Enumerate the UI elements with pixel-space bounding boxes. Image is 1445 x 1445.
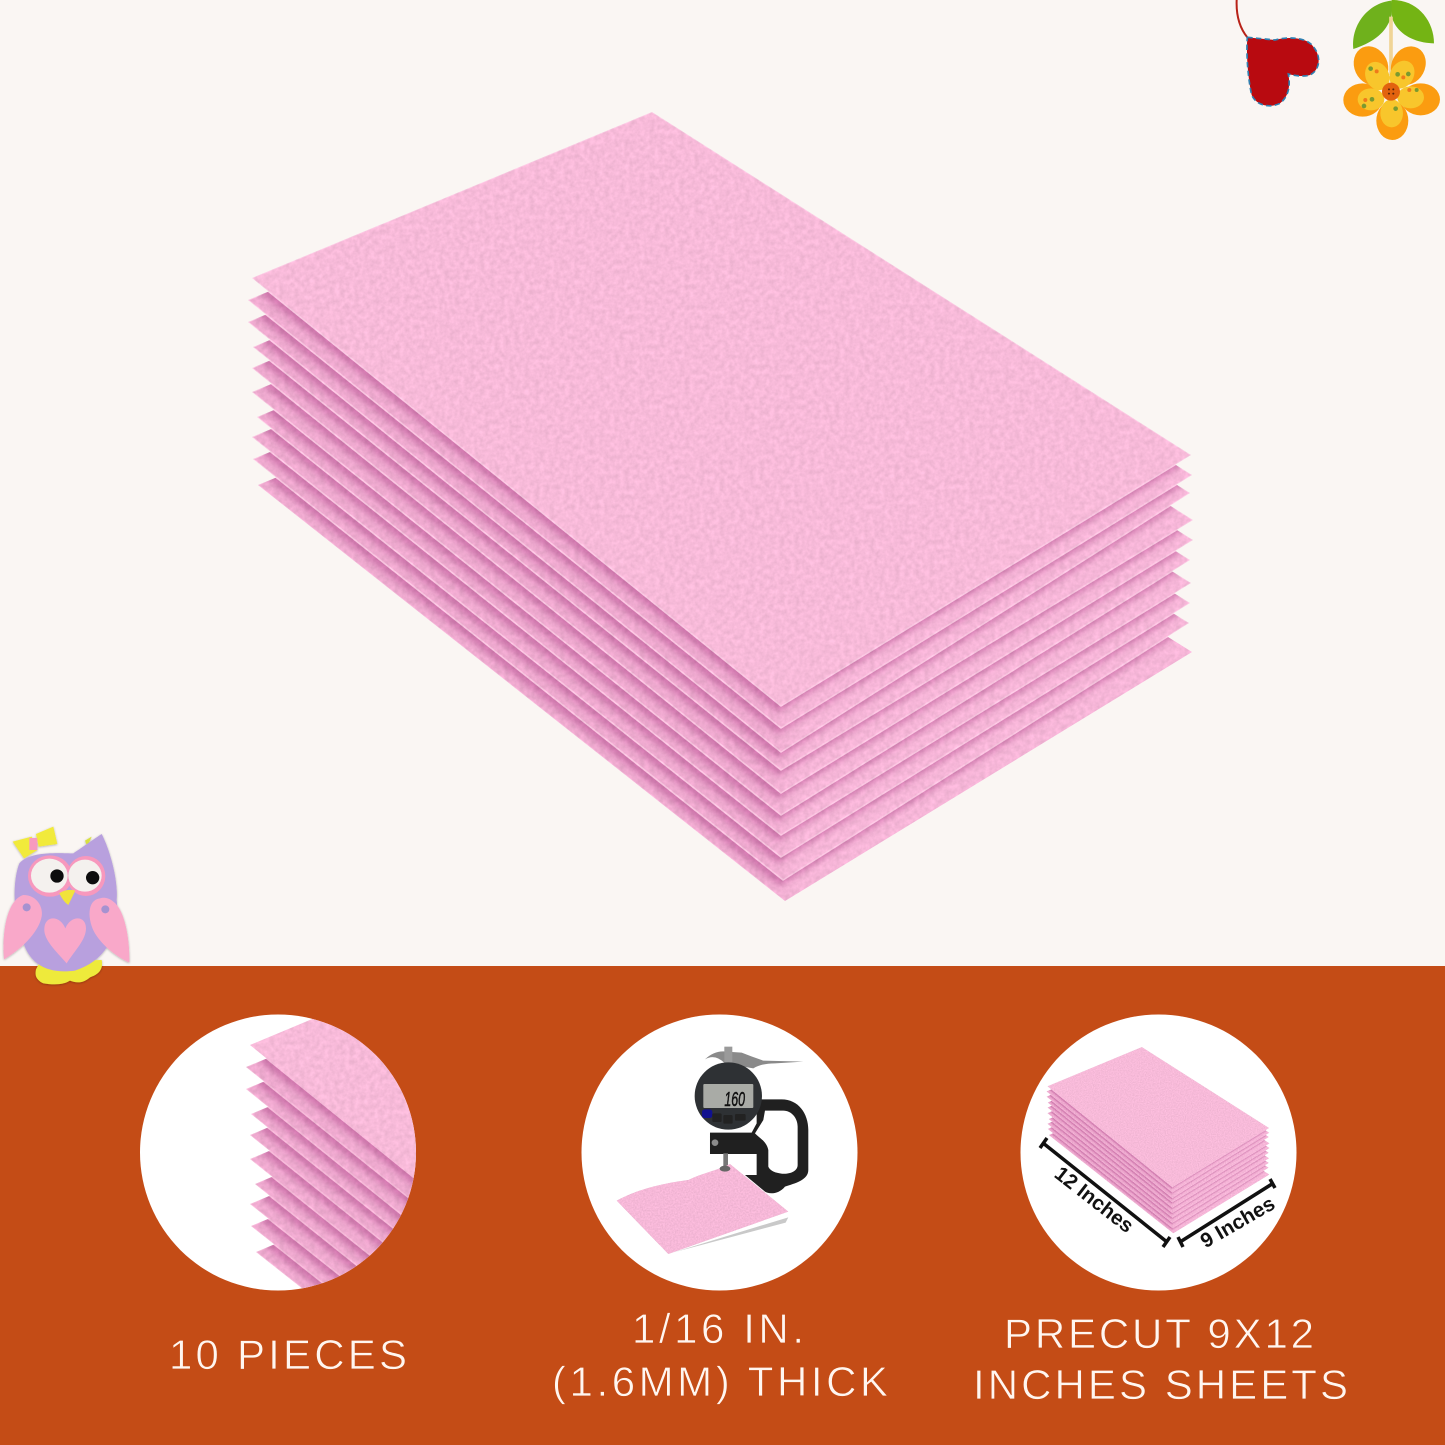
circle: small stack with dimensions <box>1020 1014 1296 1290</box>
background <box>0 0 1445 966</box>
dimension: 9 inches: 9 Inches <box>1196 1192 1279 1253</box>
dimension: 12 inches <box>1040 1138 1170 1247</box>
main felt sheet stack <box>248 112 1193 901</box>
icon: felt owl <box>3 827 129 984</box>
panel: size <box>973 1014 1348 1408</box>
icon: red felt heart ornament <box>1237 0 1319 106</box>
panel: thickness <box>552 1014 888 1405</box>
bottom band <box>0 966 1445 1445</box>
caption: size line 2: INCHES SHEETS <box>973 1361 1348 1408</box>
circle: stack edge close-up <box>140 1014 416 1290</box>
caption: thickness line 1: 1/16 IN. <box>632 1305 804 1352</box>
dimension: 9 inches <box>1178 1179 1279 1253</box>
caption: size line 1: PRECUT 9X12 <box>1004 1310 1314 1357</box>
circle: thickness gauge on felt sheet: 160 <box>724 1088 745 1111</box>
dimension: 12 inches: 12 Inches <box>1050 1162 1138 1238</box>
caption: 10 pieces: 10 PIECES <box>169 1331 407 1378</box>
panel: 10 pieces <box>140 1014 416 1370</box>
circle: thickness gauge on felt sheet <box>582 1014 858 1290</box>
caption: thickness line 2: (1.6MM) THICK <box>552 1358 888 1405</box>
icon: orange felt flower with leaves <box>1343 0 1440 140</box>
